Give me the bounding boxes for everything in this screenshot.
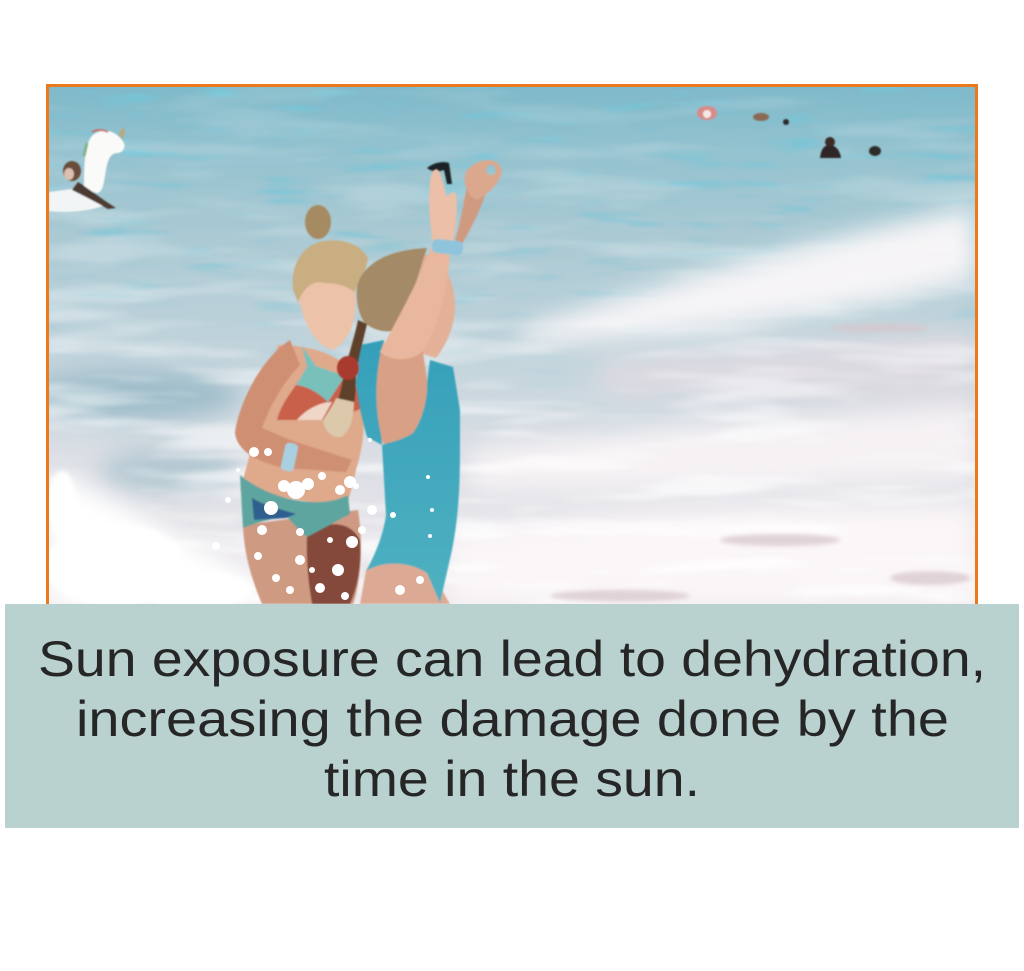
scrunchie	[337, 356, 359, 380]
back arm	[455, 182, 486, 244]
legs	[360, 563, 450, 604]
face	[417, 254, 456, 358]
water splash droplets	[212, 438, 434, 600]
hair	[357, 248, 427, 331]
crossing arm	[235, 340, 352, 472]
raised arm	[380, 243, 450, 359]
legs	[243, 510, 361, 604]
bikini top	[276, 379, 361, 420]
splash foam left	[49, 470, 230, 604]
braid tail	[323, 398, 354, 437]
photo: children playing in the sea	[20, 86, 976, 610]
caption text: Sun exposure can lead to dehydration,	[38, 631, 986, 687]
pink sand shadows	[550, 324, 970, 602]
caption text	[38, 631, 986, 807]
wristband	[431, 238, 464, 256]
photo orange border	[48, 86, 976, 604]
caption text: time in the sun.	[324, 751, 700, 807]
foam masses	[20, 205, 976, 604]
unicorn float and child	[49, 127, 125, 212]
braid	[338, 319, 368, 403]
back skin	[376, 343, 427, 444]
torso	[240, 345, 364, 508]
hair	[293, 240, 368, 302]
right girl	[323, 160, 502, 604]
caption panel	[5, 604, 1019, 828]
swimsuit	[356, 340, 460, 603]
back hand	[465, 160, 502, 200]
left girl	[235, 205, 368, 604]
infographic canvas	[5, 84, 1019, 828]
caption text: increasing the damage done by the	[76, 691, 949, 747]
front hand	[429, 169, 457, 245]
white foam streaks	[48, 86, 976, 604]
head	[297, 275, 356, 350]
sea background	[48, 86, 976, 604]
distant swimmers	[427, 106, 881, 184]
bikini bottom	[240, 475, 350, 537]
hair bun	[305, 205, 331, 239]
wristband	[280, 442, 299, 472]
teal wave streaks	[49, 87, 975, 358]
